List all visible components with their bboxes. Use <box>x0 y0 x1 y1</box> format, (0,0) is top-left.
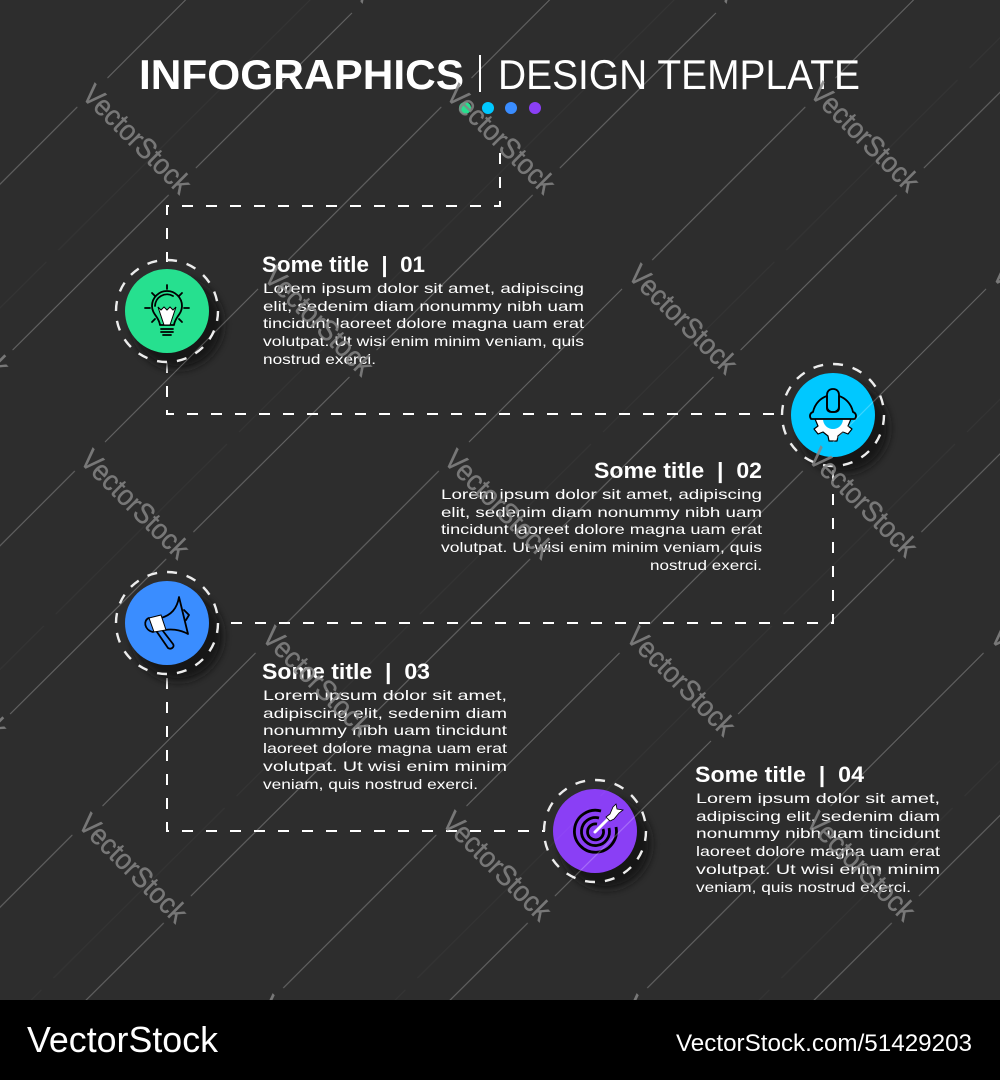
text block: step 4 <box>695 762 940 895</box>
watermark pattern: VectorStock <box>256 621 377 743</box>
text block: step 4: nonummy nibh uam tincidunt <box>696 825 940 841</box>
text block: step 2 <box>441 458 762 573</box>
text block: step 3 <box>262 659 507 792</box>
text block: step 1: elit, sedenim diam nonummy nibh uam <box>263 298 584 314</box>
title: INFOGRAPHICS <box>139 51 464 98</box>
step 2 badge: helmet and gear <box>782 364 889 473</box>
step 4 badge: target and arrow <box>544 780 651 889</box>
text block: step 3: adipiscing elit, sedenim diam <box>263 705 507 721</box>
watermark pattern: VectorStock <box>800 806 921 928</box>
step 1 badge: light bulb <box>116 260 223 369</box>
connector: step 3 to step 4 <box>167 678 545 831</box>
text block: step 1: Lorem ipsum dolor sit amet, adipiscing <box>263 280 584 296</box>
text block: step 3: laoreet dolore magna uam erat <box>263 740 507 756</box>
icon: megaphone <box>145 597 189 649</box>
text block: step 1 <box>262 252 584 367</box>
title colour dots <box>459 102 541 114</box>
watermark pattern: VectorStock <box>622 259 743 381</box>
text block: step 1: tincidunt laoreet dolore magna uam erat <box>263 315 584 331</box>
watermark pattern: VectorStock <box>620 621 741 743</box>
footer image id: VectorStock.com/51429203 <box>676 1030 972 1057</box>
title <box>139 51 860 98</box>
icon: helmet and gear <box>810 389 856 441</box>
text block: step 2: nostrud exerci. <box>650 557 762 573</box>
text block: step 3: volutpat. Ut wisi enim minim <box>263 758 507 774</box>
text block: step 2: volutpat. Ut wisi enim minim veniam, quis <box>441 539 762 555</box>
text block: step 4: laoreet dolore magna uam erat <box>696 843 940 859</box>
heading: step 3: Some title | 03 <box>262 659 430 684</box>
text block: step 4: Lorem ipsum dolor sit amet, <box>696 790 940 806</box>
text block: step 4: volutpat. Ut wisi enim minim <box>696 861 940 877</box>
text block: step 2: elit, sedenim diam nonummy nibh uam <box>441 504 762 520</box>
watermark pattern: VectorStock <box>802 442 923 564</box>
watermark pattern: VectorStock <box>804 77 925 199</box>
footer bar <box>0 1000 1000 1080</box>
text block: step 3: veniam, quis nostrud exerci. <box>263 776 478 792</box>
heading: step 2: Some title | 02 <box>594 458 762 483</box>
heading: step 1: Some title | 01 <box>262 252 425 277</box>
text block: step 3: Lorem ipsum dolor sit amet, <box>263 687 507 703</box>
watermark pattern: VectorStock <box>438 444 559 566</box>
connector: step 2 to step 3 <box>222 470 833 623</box>
step 3 badge: megaphone <box>116 572 223 681</box>
watermark pattern: VectorStock <box>74 444 195 566</box>
text block: step 1: nostrud exerci. <box>263 351 376 367</box>
text block: step 4: veniam, quis nostrud exerci. <box>696 879 911 895</box>
watermark pattern: VectorStock <box>436 806 557 928</box>
footer logo text: VectorStock <box>27 1019 219 1060</box>
icon: target and arrow <box>574 804 623 852</box>
icon: light bulb <box>145 285 189 335</box>
watermark pattern: VectorStock <box>76 79 197 201</box>
text block: step 1: volutpat. Ut wisi enim minim veniam, quis <box>263 333 584 349</box>
heading: step 4: Some title | 04 <box>695 762 865 787</box>
watermark pattern: VectorStock <box>72 808 193 930</box>
watermark pattern: VectorStock <box>440 79 561 201</box>
text block: step 2: tincidunt laoreet dolore magna uam erat <box>441 521 762 537</box>
text block: step 2: Lorem ipsum dolor sit amet, adipiscing <box>441 486 762 502</box>
text block: step 4: adipiscing elit, sedenim diam <box>696 808 940 824</box>
connector: step 1 to step 2 <box>167 362 780 414</box>
text block: step 3: nonummy nibh uam tincidunt <box>263 722 507 738</box>
connector: title to step 1 <box>167 153 500 262</box>
watermark pattern: VectorStock <box>258 261 379 383</box>
title: DESIGN TEMPLATE <box>498 51 860 98</box>
